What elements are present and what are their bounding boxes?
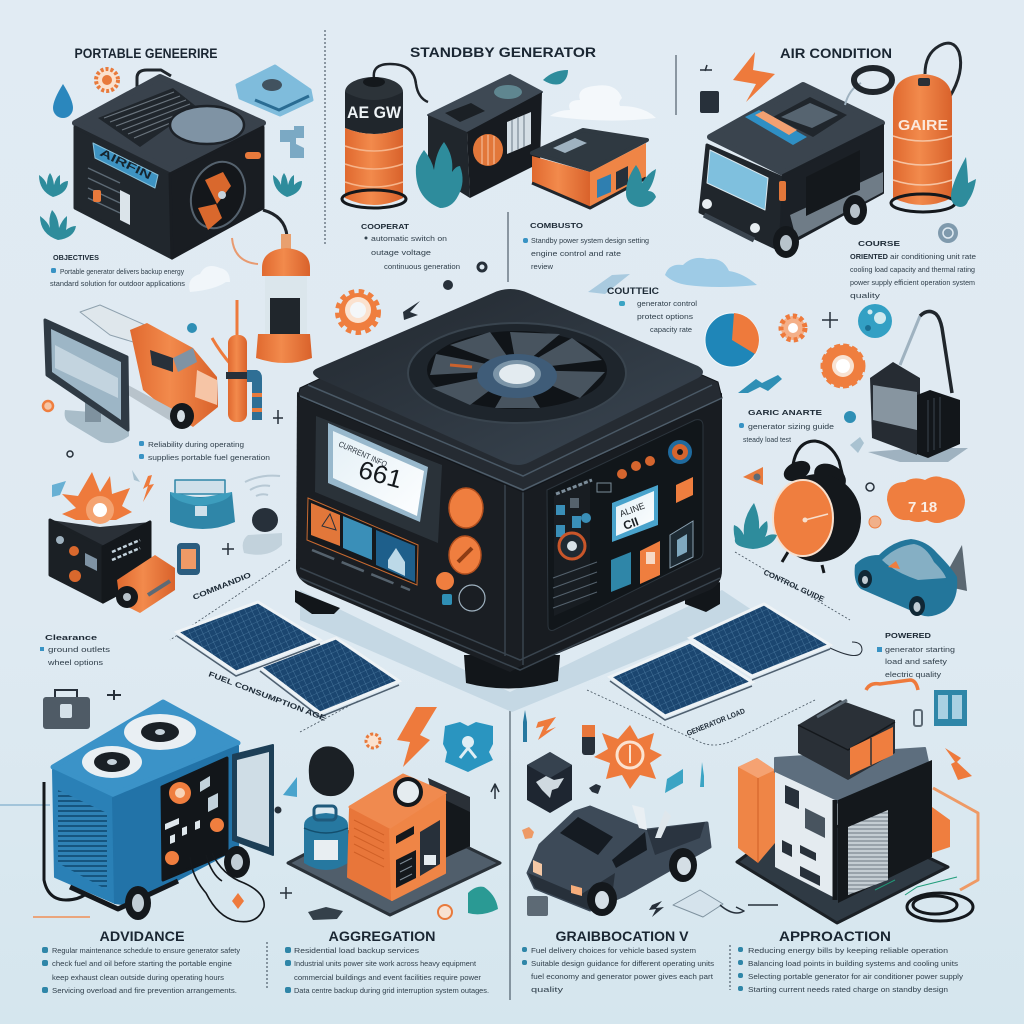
text block: course: cooling load capacity and thermal rating — [850, 265, 975, 274]
divider lines — [0, 30, 850, 1000]
text block: bottom col 3: Suitable design guidance for different operating units — [531, 959, 714, 968]
icon: portable generator black box: AIRFIN — [98, 147, 153, 182]
text block: bottom col 3: GRAIBBOCATION V — [556, 929, 688, 944]
text block: course: quality — [850, 291, 881, 300]
icon: cloud top centre — [550, 85, 656, 121]
label: control guide: CONTROL GUIDE — [762, 568, 826, 604]
main generator: shadow — [300, 590, 755, 712]
main generator: icon strip — [307, 498, 418, 590]
main generator: orange buttons — [436, 488, 485, 611]
icon: light blue device — [237, 66, 312, 115]
main generator: body edges — [300, 482, 720, 670]
text block: bottom col 1: keep exhaust clean outside during operating hours — [52, 973, 224, 982]
heading: portable generator: PORTABLE GENEERIRE — [74, 46, 218, 61]
text block: bottom col 4: Balancing load points in building systems and cooling units — [748, 959, 958, 968]
text block: truck caption: Reliability during operating — [148, 440, 244, 449]
text block: coutteic: COUTTEIC — [607, 286, 659, 297]
icon: plant right — [951, 157, 976, 207]
icon: gear centre left — [339, 293, 377, 331]
icon: gear right — [781, 316, 805, 340]
main generator: lid — [313, 289, 703, 465]
text block: bottom col 1: Servicing overload and fire prevention arrangements. — [52, 986, 237, 995]
solar panels left — [177, 602, 399, 717]
text block: course — [850, 239, 976, 300]
icon: plants left — [39, 173, 302, 240]
text block: clearance: Clearance — [45, 633, 97, 642]
icon: hose coil — [845, 68, 892, 105]
text block: bottom col 1 — [42, 929, 240, 995]
icon: gear top left — [96, 69, 118, 91]
icon: small dark star — [822, 312, 838, 328]
text block: bottom col 2: Industrial units power site work across heavy equipment — [294, 959, 476, 968]
icon: water drop — [53, 84, 73, 118]
icon: cone and plant — [734, 467, 777, 549]
icon: helmet with signal — [177, 476, 282, 575]
icon: orange tool pipes — [212, 300, 262, 422]
text block: cooperat: continuous generation — [384, 262, 460, 271]
text block: clearance: wheel options — [47, 658, 103, 667]
text block: bottom col 1: check fuel and oil before starting the portable engine — [52, 959, 232, 968]
pie chart — [705, 313, 759, 367]
main generator: right face — [523, 393, 722, 668]
label: generation: GENERATOR LOAD — [685, 706, 747, 738]
main generator: display — [315, 416, 442, 543]
text block: powered: electric quality — [885, 670, 941, 679]
text block: course: power supply efficient operation system — [850, 278, 975, 287]
icon: orange gear disc — [822, 345, 864, 387]
text block: bottom col 2: Residential load backup services — [294, 946, 419, 955]
icon: pickup truck — [527, 805, 723, 917]
text block: powered: POWERED — [885, 631, 932, 640]
text block: coutteic: protect options — [637, 312, 693, 321]
icon: small plug — [700, 65, 719, 113]
icon: arrow dart — [403, 301, 420, 320]
main generator: right control panel: ALINE — [618, 501, 646, 519]
text block: clearance — [40, 633, 111, 667]
text block: powered — [877, 631, 955, 679]
solar panels right — [610, 604, 862, 720]
text block: bottom col 4: Reducing energy bills by keeping reliable operation — [748, 946, 948, 955]
text block: objectives: OBJECTIVES — [53, 253, 99, 262]
icon: centre bottom accents — [280, 707, 499, 899]
icon: small dark curl — [866, 483, 881, 528]
icon: standby barrel — [342, 64, 428, 208]
label: fuel consumption: FUEL CONSUMPTION AGE — [207, 669, 327, 723]
icon: cloud blue — [665, 258, 757, 287]
text block: course: ORIENTED — [850, 252, 889, 261]
text block: truck caption — [139, 440, 270, 462]
text block: bottom col 3: fuel economy and generator power gives each part — [531, 972, 713, 981]
icon: mini generator with sun — [50, 472, 175, 613]
text block: coutteic: generator control — [637, 299, 697, 308]
text block: bottom col 4: APPROACTION — [779, 929, 891, 944]
icon: orange cloud with digits: 7 18 — [908, 499, 937, 516]
text block: truck caption: supplies portable fuel generation — [148, 453, 270, 462]
text block: bottom col 3 — [522, 929, 714, 994]
icon: hose and lantern canister — [232, 210, 312, 363]
icon: orange cloud with digits — [887, 476, 965, 523]
main generator: rim — [298, 290, 722, 492]
icon: van — [700, 85, 883, 258]
icon: small circles left — [43, 323, 283, 457]
text block: combusto: COMBUSTO — [530, 221, 583, 230]
icon: teal toolbox — [170, 480, 235, 529]
main generator: right control panel: CII — [621, 514, 640, 533]
text block: bottom col 2 — [285, 929, 489, 995]
main generator: display: CURRENT INFO — [337, 440, 388, 469]
icon: black cube, can and orange sun — [522, 710, 704, 839]
text block: bottom col 1: Regular maintenance schedule to ensure generator safety — [52, 946, 240, 955]
text block: bottom col 4 — [738, 929, 963, 994]
text block: garic anarte — [739, 408, 834, 444]
text block: coutteic — [607, 286, 697, 334]
text block: cooperat: automatic switch on — [371, 234, 447, 243]
icon: teal shard and bolt — [52, 470, 154, 502]
icon: paper plane — [588, 274, 630, 294]
icon: alarm clock — [773, 441, 861, 573]
text block: combusto: engine control and rate — [531, 249, 621, 258]
text block: bottom col 3: quality — [531, 985, 564, 994]
text block: combusto: review — [531, 262, 554, 271]
icon: orange barrel right: GAIRE — [898, 117, 948, 134]
icon: briefcase — [43, 690, 121, 729]
icon: blue disc — [858, 304, 892, 338]
text block: garic anarte: steady load test — [743, 435, 791, 444]
text block: cooperat: outage voltage — [371, 248, 431, 257]
text block: combusto — [523, 221, 649, 271]
icon: small round badge — [443, 262, 488, 290]
text block: clearance: ground outlets — [48, 645, 111, 654]
text block: garic anarte: generator sizing guide — [748, 422, 834, 431]
text block: objectives: Portable generator delivers backup energy — [60, 267, 184, 276]
text block: cooperat — [361, 222, 460, 271]
icon: ring right — [938, 223, 958, 243]
icon: portable generator black box — [75, 70, 263, 258]
icon: truck and monitor — [45, 305, 218, 443]
text block: objectives — [50, 253, 185, 288]
main generator: display: 661 — [355, 456, 405, 494]
icon: orange generator on platform — [288, 775, 500, 920]
icon: zigzag — [738, 375, 782, 393]
icon: teal plants middle — [416, 70, 656, 208]
text block: course: air conditioning unit rate — [890, 252, 976, 261]
main generator — [295, 289, 755, 712]
text block: bottom col 4: Starting current needs rated charge on standby design — [748, 985, 948, 994]
icon: blue generator — [44, 702, 282, 922]
icon: standby orange unit — [532, 130, 647, 208]
text block: objectives: standard solution for outdoor applications — [50, 279, 185, 288]
main generator: fan — [408, 323, 626, 423]
icon: vacuum unit — [868, 311, 968, 462]
text block: bottom col 2: Data centre backup during grid interruption system outages. — [294, 986, 489, 995]
text block: bottom col 1: ADVIDANCE — [100, 929, 184, 944]
heading: air condition: AIR CONDITION — [780, 46, 892, 61]
icon: orange arc, pin and tile — [866, 680, 972, 780]
main generator: feet — [295, 582, 720, 689]
icon: cloud top — [189, 266, 230, 292]
text block: bottom col 2: AGGREGATION — [328, 929, 436, 944]
icon: orange barrel right — [891, 43, 961, 212]
text block: powered: load and safety — [885, 657, 947, 666]
text block: commandio: COMMANDIO — [191, 570, 252, 602]
text block: bottom col 4: Selecting portable generator for air conditioner power supply — [748, 972, 963, 981]
text block: bottom col 2: commercial buildings and event facilities require power — [294, 973, 482, 982]
text block: bottom col 3: Fuel delivery choices for vehicle based system — [531, 946, 696, 955]
icon: lightning top right — [733, 52, 775, 102]
text block: course: COURSE — [858, 239, 900, 248]
heading: standby generator: STANDBBY GENERATOR — [410, 45, 596, 60]
icon: blue puzzle — [280, 126, 304, 158]
text block: combusto: Standby power system design setting — [531, 236, 649, 245]
icon: small teal dot and check — [844, 411, 864, 453]
icon: equipment tower — [720, 700, 978, 923]
text block: powered: generator starting — [885, 645, 955, 654]
text block: cooperat: COOPERAT — [361, 222, 409, 231]
icon: standby black unit — [428, 75, 542, 198]
main generator: left face — [296, 392, 523, 672]
icon: blue car — [855, 539, 967, 616]
icon: standby barrel: AE GW — [347, 103, 402, 122]
text block: coutteic: capacity rate — [650, 325, 692, 334]
main generator: right control panel — [547, 420, 703, 630]
text block: garic anarte: GARIC ANARTE — [748, 408, 822, 417]
